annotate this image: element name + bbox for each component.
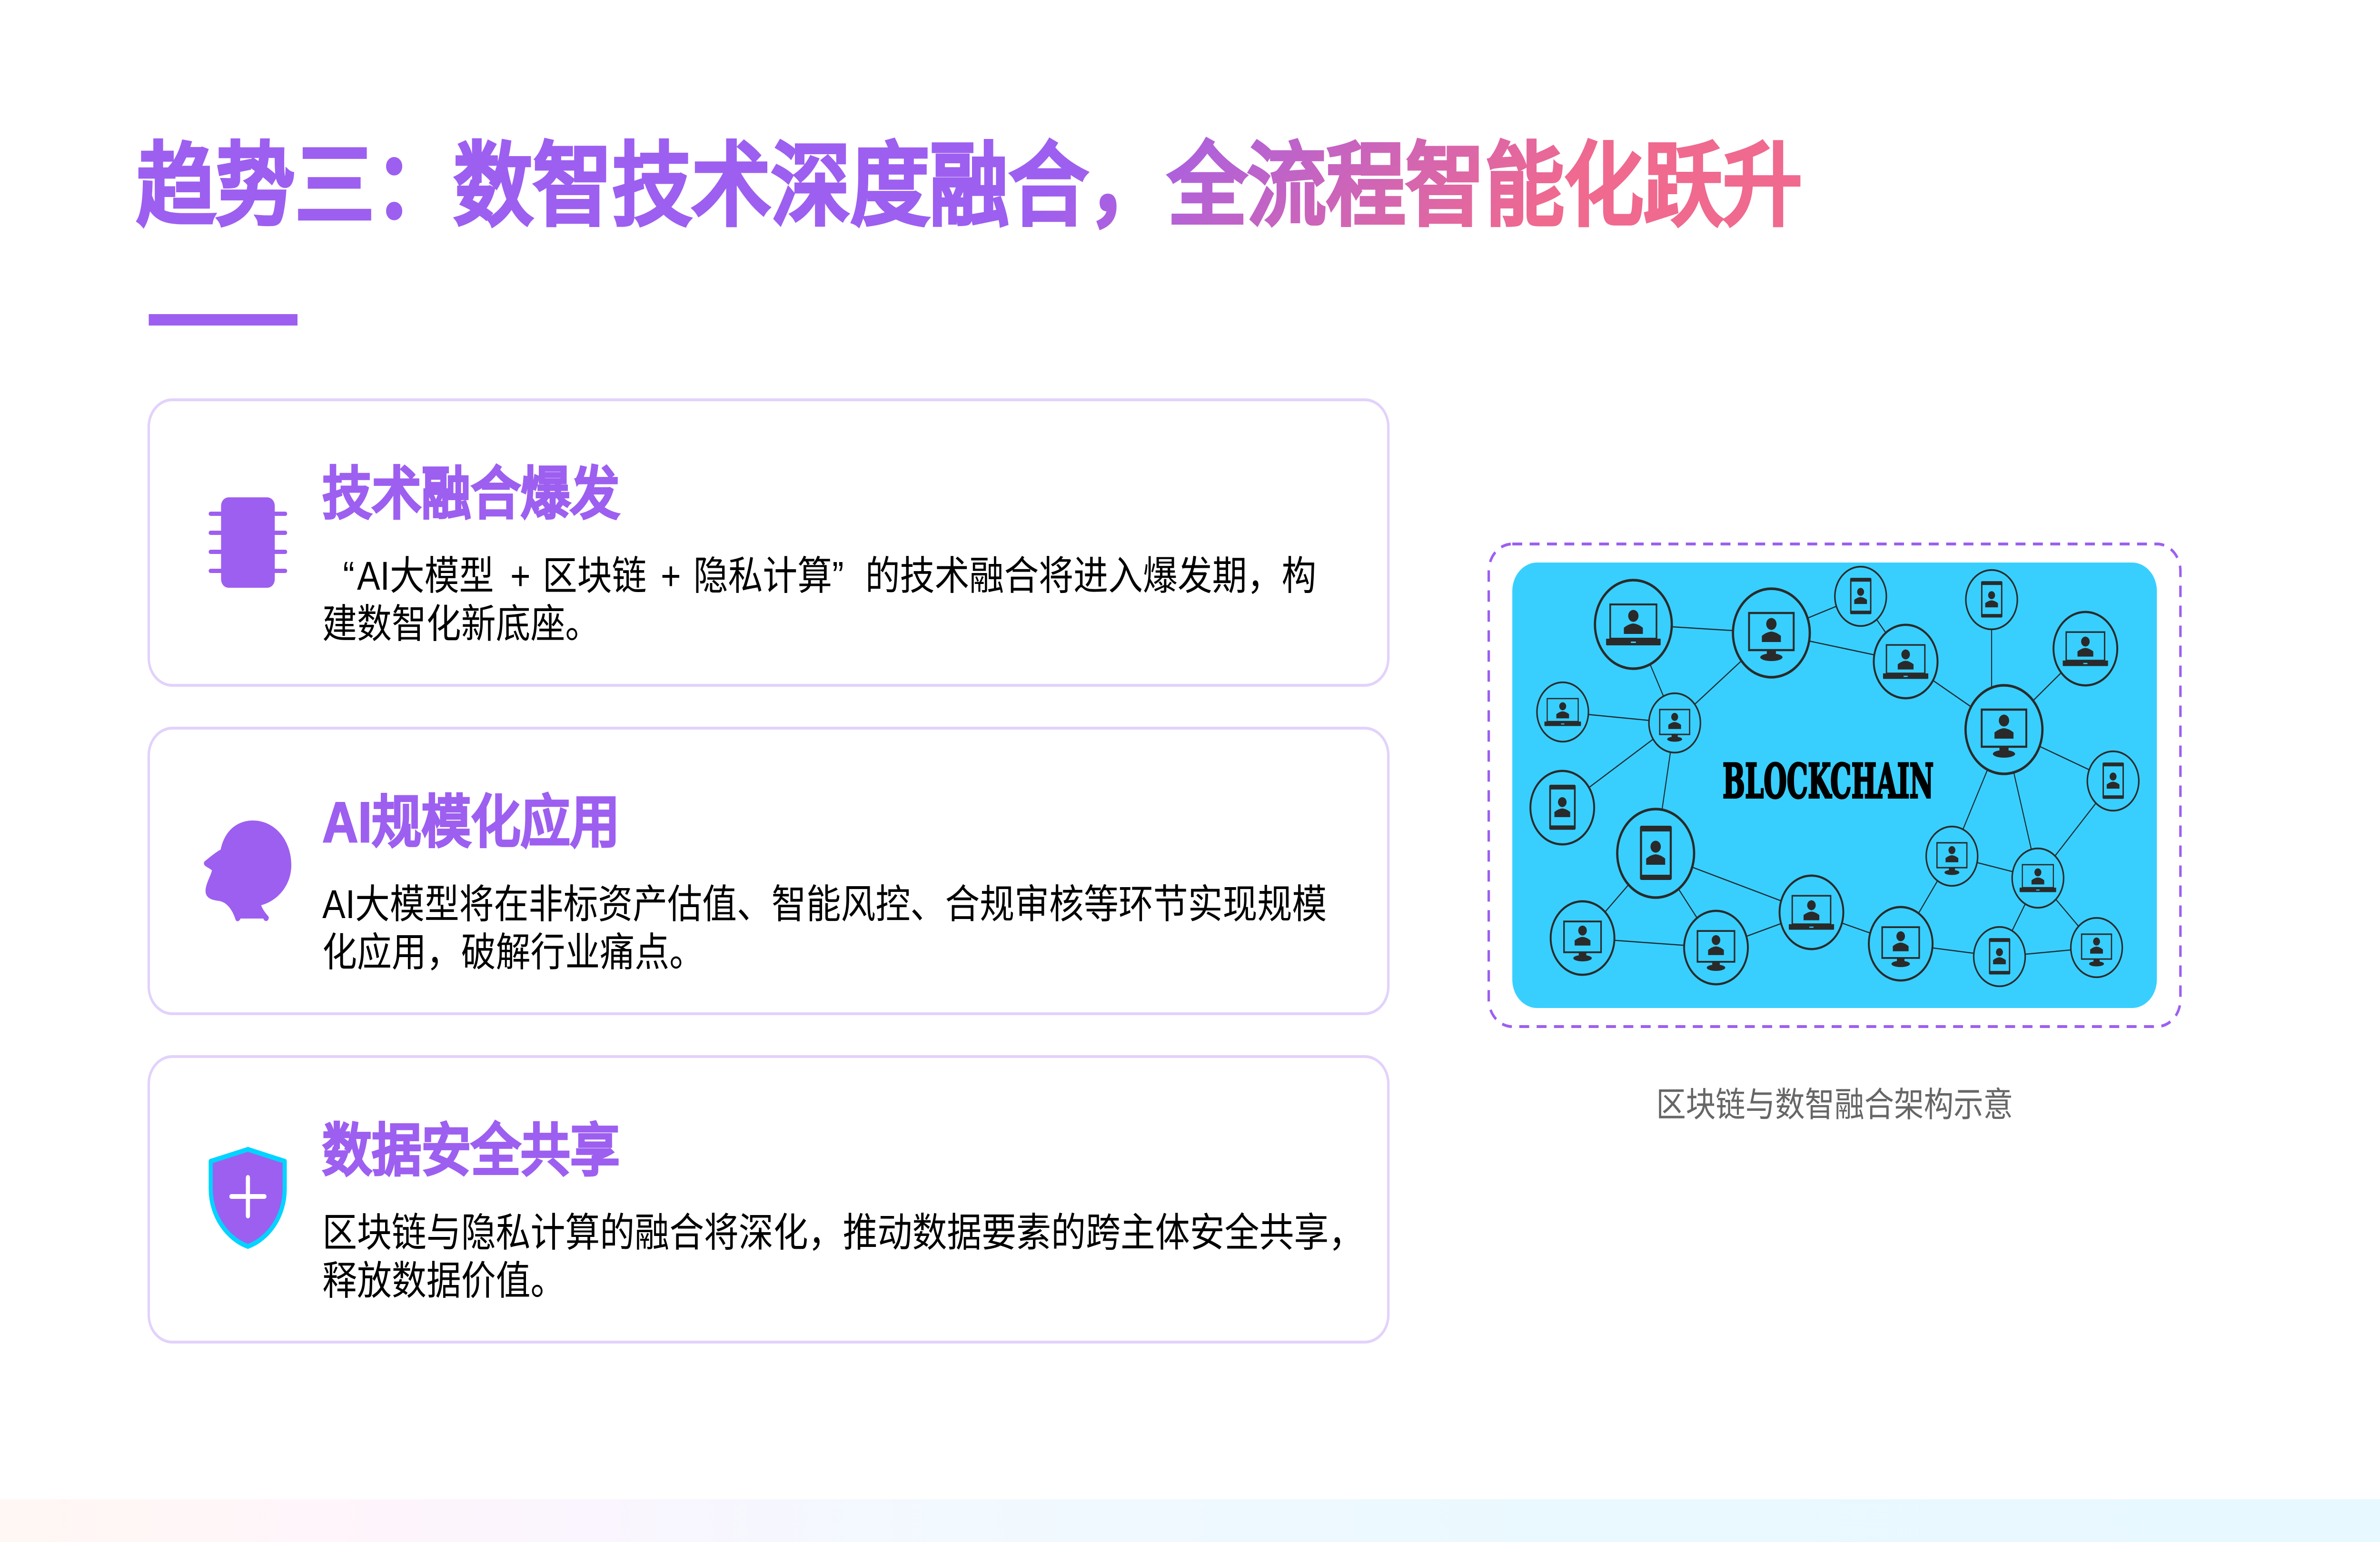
text: AI规模化应用 body: AI大模型将在非标资产估值、智能风控、合规审核等环节实现规模 xyxy=(322,882,1327,927)
node: desktop 7 xyxy=(1965,685,2043,774)
image frame: dashed border xyxy=(1489,544,2181,1027)
title accent bar xyxy=(149,314,298,326)
node: desktop 16 xyxy=(1684,911,1748,984)
heading: 技术融合爆发: 技术融合爆发 xyxy=(322,462,620,526)
panel: 数据安全共享 xyxy=(149,1057,1388,1342)
text: 技术融合爆发 body: 的技术融合将进入爆发期，构 xyxy=(865,554,1316,598)
node: laptop 14 xyxy=(2012,849,2063,908)
text: 技术融合爆发 body: + xyxy=(661,554,681,598)
text: AI规模化应用 body: 化应用，破解行业痛点。 xyxy=(322,930,704,975)
node: tablet 12 xyxy=(1617,809,1694,898)
text: 数据安全共享 body: 释放数据价值。 xyxy=(322,1258,565,1303)
node: desktop 18 xyxy=(1869,907,1933,980)
node: tablet 11 xyxy=(1530,771,1594,844)
text: 数据安全共享 body: 区块链与隐私计算的融合将深化，推动数据要素的跨主体安全共享， xyxy=(322,1210,1363,1255)
footer gradient band xyxy=(0,1499,2380,1542)
card outline xyxy=(149,400,1388,685)
heading: AI规模化应用: AI规模化应用 xyxy=(322,790,620,854)
node: laptop 4 xyxy=(1874,625,1937,698)
node: laptop 6 xyxy=(2053,612,2117,685)
node: laptop 9 xyxy=(1537,682,1588,741)
node: laptop 17 xyxy=(1780,876,1844,949)
image caption: 区块链与数智融合架构示意 xyxy=(1656,1086,2013,1124)
node: desktop 20 xyxy=(2071,918,2122,977)
network nodes xyxy=(1530,567,2139,986)
node: desktop 15 xyxy=(1551,901,1615,975)
card outline xyxy=(149,1057,1388,1342)
text: 技术融合爆发 body: ” xyxy=(832,554,844,598)
network connection lines xyxy=(1562,596,2113,957)
node: tablet 19 xyxy=(1973,927,2025,986)
title: 趋势三：数智技术深度融合，全流程智能化跃升 xyxy=(136,135,1802,237)
node: tablet 8 xyxy=(2087,751,2139,811)
text: 技术融合爆发 body: AI大模型 xyxy=(357,554,494,598)
node: laptop 1 xyxy=(1595,580,1672,669)
text: 技术融合爆发 body: 区块链 xyxy=(543,554,646,598)
text: 技术融合爆发 body xyxy=(322,554,1316,646)
panel: AI规模化应用 xyxy=(149,728,1388,1014)
node: desktop 10 xyxy=(1649,693,1700,752)
diagram background xyxy=(1512,563,2157,1008)
node: tablet 5 xyxy=(1966,570,2017,629)
icon: AI head xyxy=(204,820,291,921)
text: 技术融合爆发 body: 隐私计算 xyxy=(694,554,832,598)
text: AI规模化应用 body xyxy=(322,882,1327,975)
icon: chip xyxy=(208,497,287,588)
text: 技术融合爆发 body: “ xyxy=(343,554,355,598)
node: desktop 2 xyxy=(1733,589,1810,677)
text: 数据安全共享 body xyxy=(322,1210,1363,1303)
text: 技术融合爆发 body: + xyxy=(510,554,531,598)
diagram label: BLOCKCHAIN: BLOCKCHAIN xyxy=(1723,753,1934,809)
panel: 技术融合爆发 xyxy=(149,400,1388,685)
blockchain network diagram xyxy=(1512,563,2157,1008)
heading: 数据安全共享: 数据安全共享 xyxy=(322,1118,620,1183)
node: desktop 13 xyxy=(1926,827,1978,886)
text: 技术融合爆发 body: 建数智化新底座。 xyxy=(322,602,600,646)
node: tablet 3 xyxy=(1835,567,1886,626)
icon: shield xyxy=(211,1149,285,1246)
card outline xyxy=(149,728,1388,1014)
